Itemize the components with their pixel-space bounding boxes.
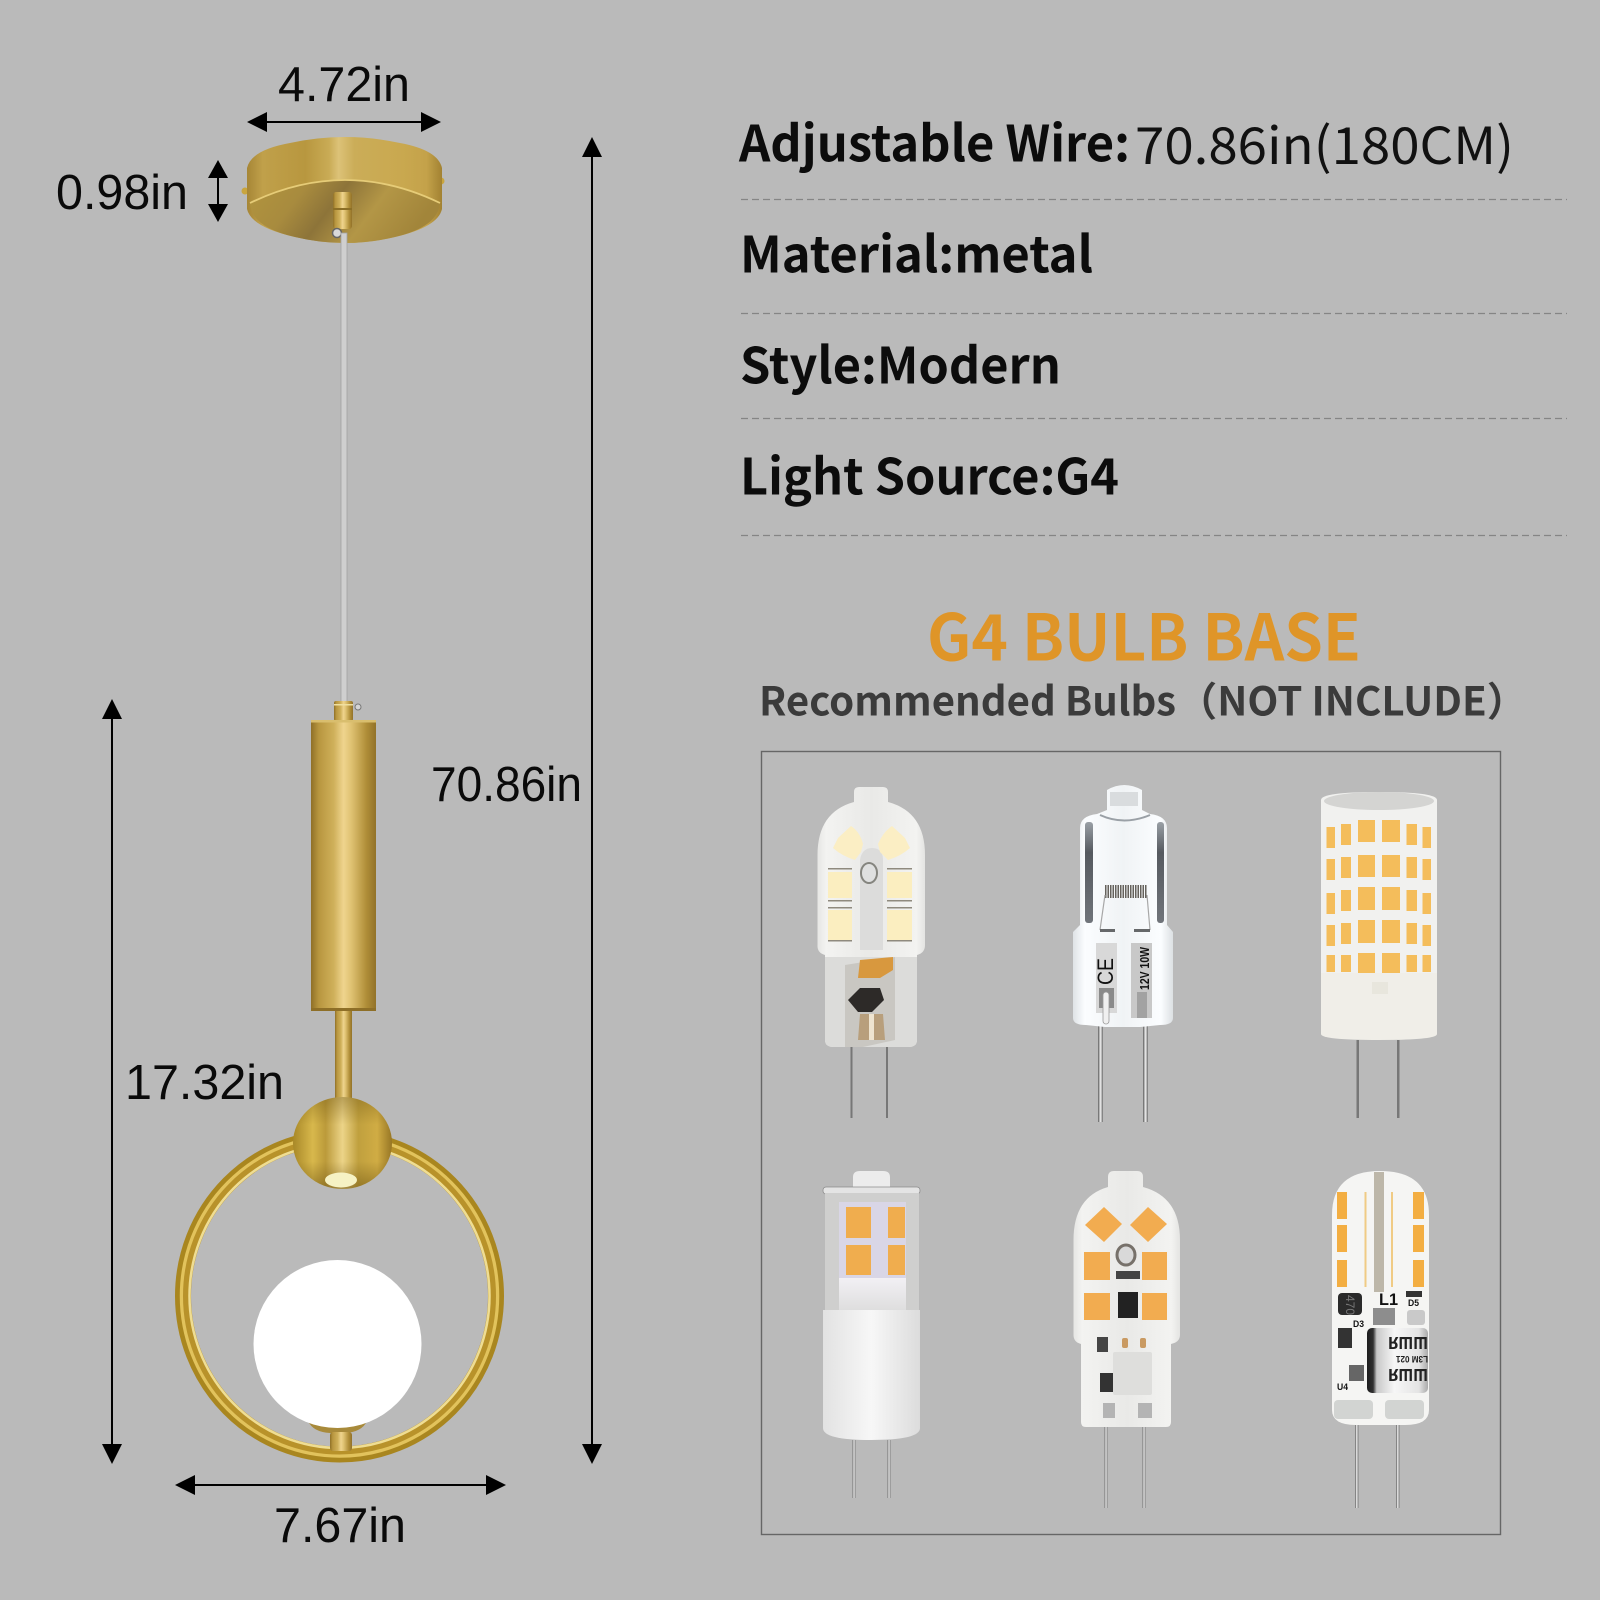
dimension: fixture height: 17.32in (125, 1056, 284, 1110)
electrolytic capacitor: L3M 021 (1395, 1353, 1428, 1364)
spec: material: Material:metal (740, 216, 1093, 288)
L1 label: L1 (1379, 1290, 1398, 1309)
dimension: ring width: 7.67in (274, 1499, 406, 1553)
bulb 5: amber LED capsule (1074, 1171, 1180, 1508)
electrolytic capacitor (1367, 1328, 1428, 1393)
inductor with 470 print: 470 (1343, 1295, 1357, 1315)
heading: G4 bulb base: G4 BULB BASE (927, 588, 1361, 680)
bulb 4: frosted base LED (823, 1171, 920, 1498)
spec: adjustable wire (738, 104, 1514, 179)
dimension: fixture height (102, 699, 284, 1464)
subheading: recommended bulbs: （NOT INCLUDE） (1177, 670, 1527, 728)
pendant lamp (179, 137, 500, 1458)
dimension: canopy width (247, 58, 441, 132)
panel: bulb grid (762, 752, 1500, 1534)
D3 label: D3 (1353, 1319, 1364, 1330)
dimension: canopy width: 4.72in (278, 58, 410, 112)
bulb 2: halogen capsule (1073, 785, 1173, 1122)
cylindrical tube (311, 701, 376, 1011)
subheading: recommended bulbs: Recommended Bulbs (759, 670, 1176, 728)
voltage print: 12V 10W (1138, 947, 1152, 990)
suspension wire (341, 233, 347, 703)
dimension: ring width (175, 1475, 506, 1553)
bulb 3: corn LED (1321, 792, 1437, 1118)
bulb 1: clear white LED capsule (817, 787, 925, 1118)
subheading: recommended bulbs (759, 670, 1527, 728)
white glass globe (254, 1260, 422, 1451)
dimension: canopy height (56, 160, 228, 222)
dimension: total length: 70.86in (431, 758, 582, 812)
specification list (738, 104, 1567, 536)
D5 label: D5 (1408, 1298, 1420, 1309)
bulb 6: silicone PCB LED (1332, 1171, 1429, 1508)
gold ring (179, 1134, 500, 1458)
CE mark: CE (1093, 958, 1118, 985)
spec: style: Style:Modern (740, 326, 1061, 398)
dimension: total length (431, 137, 602, 1464)
stem and ball joint (293, 1011, 392, 1189)
spec: adjustable wire: 70.86in(180CM) (1135, 105, 1514, 179)
U4 label: U4 (1337, 1382, 1349, 1393)
electrolytic capacitor: шшя (1388, 1364, 1428, 1389)
inductor with 470 print (1338, 1293, 1362, 1315)
spec: light source: Light Source:G4 (740, 438, 1119, 510)
spec: adjustable wire: Adjustable Wire: (738, 104, 1130, 176)
ceiling canopy (242, 137, 444, 243)
dimension: canopy height: 0.98in (56, 166, 188, 220)
electrolytic capacitor: шшя (1388, 1332, 1428, 1357)
